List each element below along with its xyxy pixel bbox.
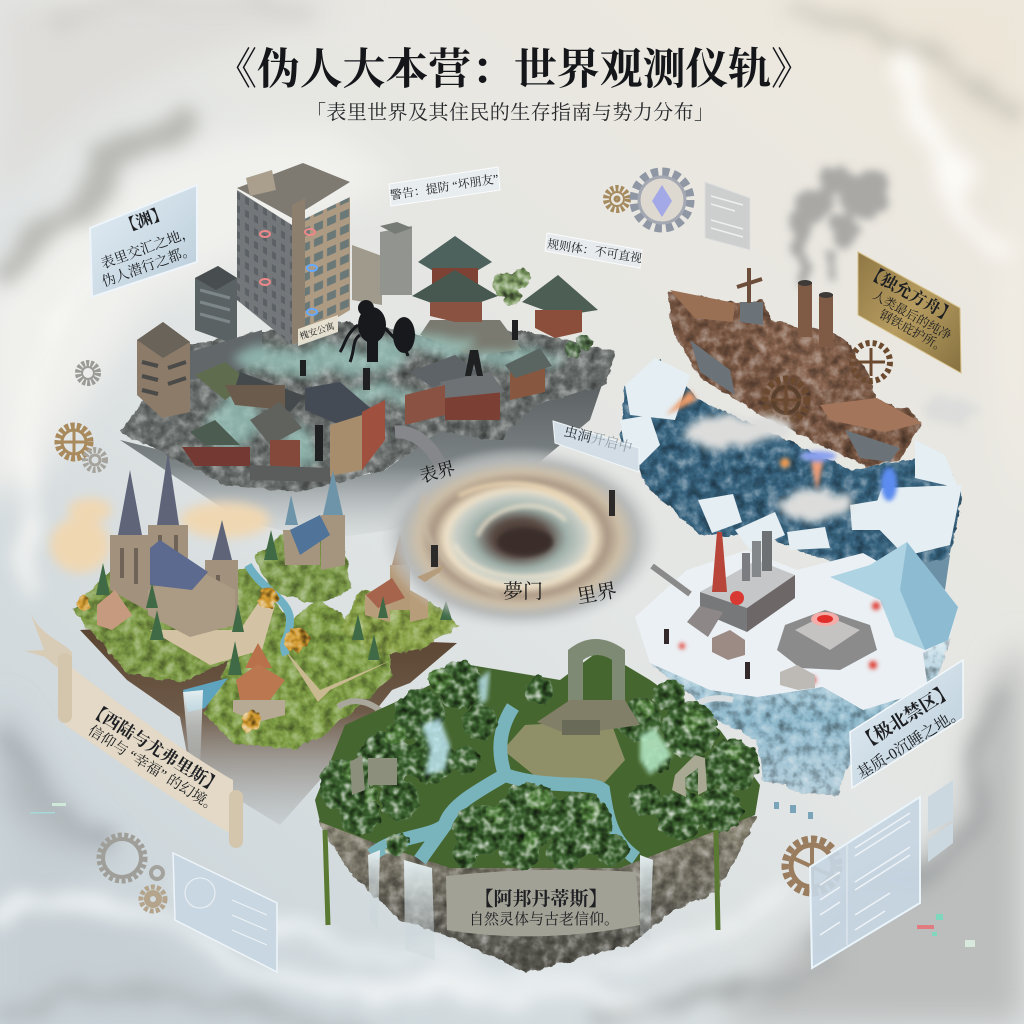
tower apartments bbox=[237, 163, 350, 345]
gear: small bbox=[85, 450, 105, 470]
autumn trees bbox=[77, 588, 309, 732]
upper house bbox=[750, 320, 850, 392]
main gear bbox=[765, 379, 807, 421]
ice cliffs bbox=[650, 640, 950, 797]
waterfall bbox=[183, 690, 203, 768]
ice shards bbox=[774, 802, 813, 819]
ice mountain bbox=[830, 542, 958, 650]
small houses bbox=[97, 590, 132, 630]
ice bridge bbox=[680, 698, 733, 717]
mast bbox=[737, 268, 762, 303]
gear: bronze bbox=[58, 426, 90, 458]
gear: bronze small bbox=[606, 188, 628, 210]
bronze gear bottom right bbox=[785, 839, 839, 893]
rear gear bbox=[852, 343, 890, 381]
small huts bbox=[712, 630, 815, 690]
label: surface: 表界 bbox=[417, 458, 457, 487]
island: west continent bbox=[50, 452, 460, 825]
callout: wormhole opening: 虫洞开启中 bbox=[562, 423, 634, 456]
river bbox=[248, 565, 290, 655]
central wormhole vortex bbox=[380, 446, 660, 630]
label: inner world: 里界 bbox=[575, 579, 619, 608]
stone plaque: 【阿邦丹蒂斯】 bbox=[474, 888, 608, 910]
bridge bbox=[395, 432, 445, 480]
callout: wormhole opening bbox=[553, 421, 639, 472]
left block bbox=[687, 606, 723, 637]
cathedral bbox=[97, 452, 238, 637]
right ruin bbox=[672, 755, 707, 797]
teal mist bbox=[210, 333, 565, 474]
towers bbox=[110, 525, 238, 632]
blue spirit small bbox=[478, 670, 490, 705]
ruined wall bbox=[190, 330, 262, 380]
blue roof bbox=[150, 540, 208, 590]
gear: beige bbox=[141, 887, 165, 911]
apartment sign bbox=[298, 315, 338, 346]
grass left bbox=[73, 570, 290, 683]
tree clusters: dark bbox=[319, 661, 759, 870]
crane bbox=[652, 566, 690, 594]
steam clouds bbox=[687, 396, 976, 520]
stone ruins left bbox=[350, 755, 397, 795]
tree bbox=[493, 269, 593, 358]
small tower church bbox=[365, 533, 428, 622]
bow deck bbox=[670, 290, 735, 322]
plaque: ark bbox=[858, 252, 961, 373]
swirl disc bbox=[380, 446, 660, 630]
island: Abundantis forest bbox=[315, 639, 760, 973]
glitch marks bbox=[30, 803, 975, 947]
red lights bbox=[679, 602, 880, 684]
lower-left houses bbox=[182, 348, 552, 482]
panel: 渊: 【渊】 bbox=[119, 204, 170, 237]
scroll ends bbox=[58, 653, 243, 848]
funnels bbox=[798, 280, 833, 347]
island underside bbox=[120, 355, 612, 540]
panel: north zone bbox=[850, 660, 967, 788]
tower windows bbox=[122, 535, 218, 615]
gear: steel with crystal bbox=[634, 172, 690, 228]
red-roof church bbox=[233, 643, 285, 722]
warm clouds bbox=[50, 498, 270, 573]
pool bbox=[183, 678, 228, 712]
blue-grey plating bbox=[690, 302, 900, 462]
ground bbox=[315, 650, 760, 868]
small data cards bbox=[928, 780, 953, 862]
courtyard paths bbox=[150, 600, 275, 665]
hanging vines bbox=[325, 830, 718, 930]
cliff under sea bbox=[620, 420, 950, 590]
right pavilion bbox=[522, 275, 598, 338]
smoke from funnels bbox=[791, 164, 891, 288]
thrusters bbox=[666, 390, 897, 501]
apartment sign: 槐安公寓 bbox=[298, 320, 336, 341]
grass lower bbox=[203, 600, 392, 750]
sea surface bbox=[620, 360, 962, 570]
earth underside bbox=[80, 620, 457, 825]
small gears at left bbox=[58, 363, 105, 470]
gear: tiny bbox=[151, 867, 163, 879]
ship: rusted ark bbox=[666, 268, 922, 501]
stone plaque: 自然灵体与古老信仰。 bbox=[469, 910, 619, 928]
green spirit bbox=[640, 728, 672, 775]
neon eye signs bbox=[260, 229, 317, 315]
title: 《伪人大本营：世界观测仪轨》 bbox=[214, 46, 814, 94]
banner tail bbox=[25, 612, 72, 680]
gear: steel ring bbox=[99, 835, 145, 881]
sand centre bbox=[503, 720, 625, 782]
hull bbox=[668, 292, 922, 467]
swirl streaks bbox=[422, 484, 590, 595]
grass right bbox=[340, 590, 460, 655]
stone plaque bbox=[446, 870, 640, 936]
small grey tower bbox=[195, 266, 237, 345]
low brown building bbox=[137, 322, 190, 418]
label: dream gate: 夢门 bbox=[503, 580, 543, 603]
plaque: ark: 钢铁庇护所。 bbox=[877, 306, 950, 356]
glass card bottom left bbox=[173, 853, 277, 972]
panel: 渊 bbox=[90, 185, 197, 297]
banner: west: 信仰与 “幸福” 的幻境。 bbox=[85, 721, 222, 816]
info card top bbox=[705, 182, 750, 250]
callout: rule entity: 规则体：不可直视 bbox=[546, 236, 643, 265]
banner: west: 【西陆与尤弗里斯】 bbox=[85, 699, 225, 797]
snow top bbox=[635, 550, 958, 710]
bridge bbox=[338, 701, 392, 722]
ice floes bbox=[620, 358, 962, 556]
subtitle: 「表里世界及其住民的生存指南与势力分布」 bbox=[306, 101, 714, 124]
shadow figures bbox=[300, 320, 518, 461]
figures bbox=[431, 490, 615, 567]
river bbox=[372, 707, 636, 860]
spires bbox=[118, 452, 232, 560]
plaque: ark: 人类最后的纯净 bbox=[870, 287, 955, 343]
glass card bottom right bbox=[810, 797, 920, 968]
panel: north zone: 【极北禁区】 bbox=[854, 679, 957, 754]
island ground bbox=[120, 320, 615, 492]
radio mast bbox=[712, 532, 727, 592]
stone arch bbox=[537, 639, 640, 735]
plaque: ark: 【独允方舟】 bbox=[863, 261, 959, 326]
main facility bbox=[700, 531, 795, 632]
nave bbox=[148, 565, 235, 637]
upper plateau bbox=[255, 530, 352, 605]
temple pavilion bbox=[412, 236, 522, 355]
panel: 渊: 表里交汇之地， bbox=[99, 223, 196, 273]
panel: north zone: 基质-0沉睡之地。 bbox=[854, 702, 967, 783]
rock body bbox=[317, 817, 757, 973]
central reactor bbox=[777, 610, 877, 670]
rock ledge bbox=[417, 565, 445, 582]
back towers bbox=[352, 222, 412, 305]
wormhole labels bbox=[417, 421, 639, 608]
island: frozen sea bbox=[620, 358, 962, 590]
panel: 渊: 伪人潜行之都。 bbox=[100, 241, 197, 291]
callout: warning: 警告：提防 “坏朋友” bbox=[389, 171, 500, 203]
right chapel bbox=[283, 470, 345, 570]
waterfalls bbox=[368, 850, 653, 960]
lower paths bbox=[285, 650, 392, 702]
gears top centre bbox=[606, 172, 690, 228]
ice mountain shade bbox=[900, 542, 958, 650]
figures bbox=[664, 629, 750, 679]
gear: grey bbox=[78, 363, 98, 383]
banner body bbox=[65, 662, 233, 835]
blue spirit bbox=[422, 718, 450, 775]
trees bbox=[96, 530, 452, 675]
shadow creature bbox=[340, 300, 415, 362]
island: arctic zone bbox=[635, 531, 958, 819]
dark core bbox=[497, 528, 553, 556]
stern deck bbox=[820, 398, 922, 432]
tree clusters: light bbox=[341, 668, 744, 849]
island: abyss city bbox=[120, 163, 615, 540]
gears bbox=[765, 343, 890, 421]
banner: west bbox=[25, 612, 243, 848]
bottom left gears bbox=[99, 835, 165, 911]
